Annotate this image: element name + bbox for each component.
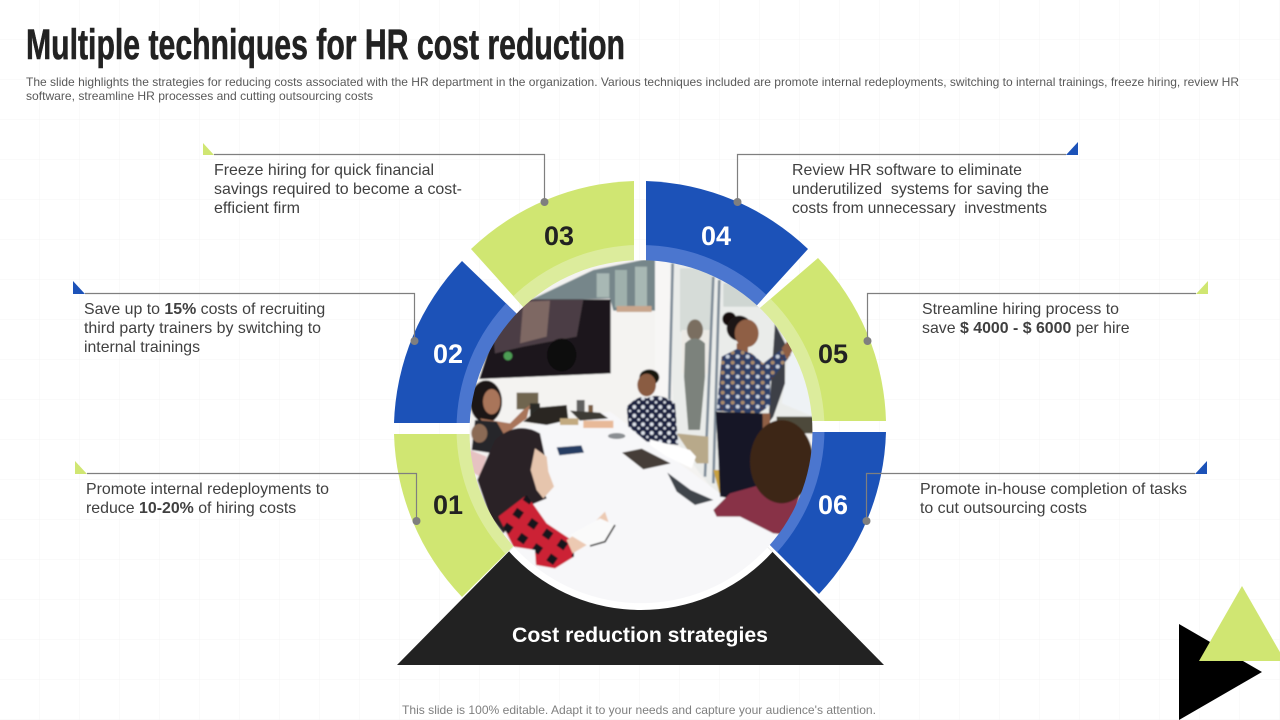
segment 03 [471, 181, 634, 307]
subtitle text block: software, streamline HR processes and cutting outsourcing costs [26, 89, 373, 103]
title: Multiple techniques for HR cost reduction [26, 21, 625, 69]
laptop [667, 473, 713, 505]
number 05: 05 [818, 339, 848, 369]
black triangle base [397, 418, 884, 665]
back windows [523, 257, 655, 311]
callout 01: Promote internal redeployments to [86, 481, 329, 498]
white wall right column [655, 257, 670, 397]
glass door area [670, 260, 813, 498]
tablet on table [622, 449, 671, 469]
standing woman [722, 312, 736, 326]
segment 06 [770, 432, 886, 594]
subtitle text block: The slide highlights the strategies for reducing costs associated with the HR department in the organization. Various techniques included are promote internal redeployments, switching to internal trainings, freeze hiring, review HR [26, 75, 1239, 89]
segment 04 [646, 181, 808, 306]
number 02: 02 [433, 339, 463, 369]
seated woman [639, 369, 659, 385]
notebook front [572, 518, 610, 546]
marker triangle 02 [73, 281, 85, 294]
seated woman far left [470, 380, 502, 423]
callout 05 [864, 281, 1208, 345]
footer note: This slide is 100% editable. Adapt it to your needs and capture your audience's attention. [402, 703, 876, 717]
callout 01: reduce 10-20% of hiring costs [86, 500, 296, 517]
marker triangle 05 [1196, 281, 1208, 294]
number 01: 01 [433, 490, 463, 520]
callout 04: underutilized systems for saving the [792, 181, 1049, 198]
callout 04 [734, 142, 1078, 217]
segment 01 [394, 434, 514, 597]
callout 02: third party trainers by switching to [84, 320, 321, 337]
callout 03 [203, 143, 548, 217]
woman front left [477, 428, 547, 533]
marker triangle 01 [75, 461, 87, 474]
callout 02 [73, 281, 418, 356]
decorative corner triangles [1179, 586, 1280, 720]
TV screen [479, 299, 611, 379]
callout 06: Promote in-house completion of tasks [920, 481, 1187, 498]
table [517, 414, 776, 570]
marker triangle 03 [203, 143, 214, 155]
segment 05 [760, 258, 886, 421]
woman bottom right [713, 485, 800, 535]
segment 02 [394, 261, 517, 423]
subtitle text block [26, 75, 1239, 103]
callout 02: internal trainings [84, 339, 200, 356]
callout 05: save $ 4000 - $ 6000 per hire [922, 320, 1130, 337]
callout 03: savings required to become a cost- [214, 181, 462, 198]
callout 06: to cut outsourcing costs [920, 500, 1087, 517]
photo: team meeting around a table [470, 260, 812, 570]
center label: Cost reduction strategies [512, 624, 768, 647]
table clutter [517, 393, 538, 409]
reflection of person [687, 319, 703, 341]
marker triangle 04 [1066, 142, 1078, 155]
number 06: 06 [818, 490, 848, 520]
callout 01 [75, 461, 420, 525]
whiteboard [782, 352, 812, 415]
white ring under photo [509, 546, 772, 610]
number 03: 03 [544, 221, 574, 251]
callout 04: Review HR software to eliminate [792, 162, 1022, 179]
callout 03: Freeze hiring for quick financial [214, 162, 434, 179]
callout 04: costs from unnecessary investments [792, 200, 1047, 217]
circular segments diagram [394, 181, 886, 597]
callout 02: Save up to 15% costs of recruiting [84, 301, 325, 318]
navy notebook [557, 445, 584, 455]
number 04: 04 [701, 221, 731, 251]
callout 06 [862, 461, 1207, 525]
callout 05: Streamline hiring process to [922, 301, 1119, 318]
marker triangle 06 [1195, 461, 1207, 474]
callout 03: efficient firm [214, 200, 300, 217]
